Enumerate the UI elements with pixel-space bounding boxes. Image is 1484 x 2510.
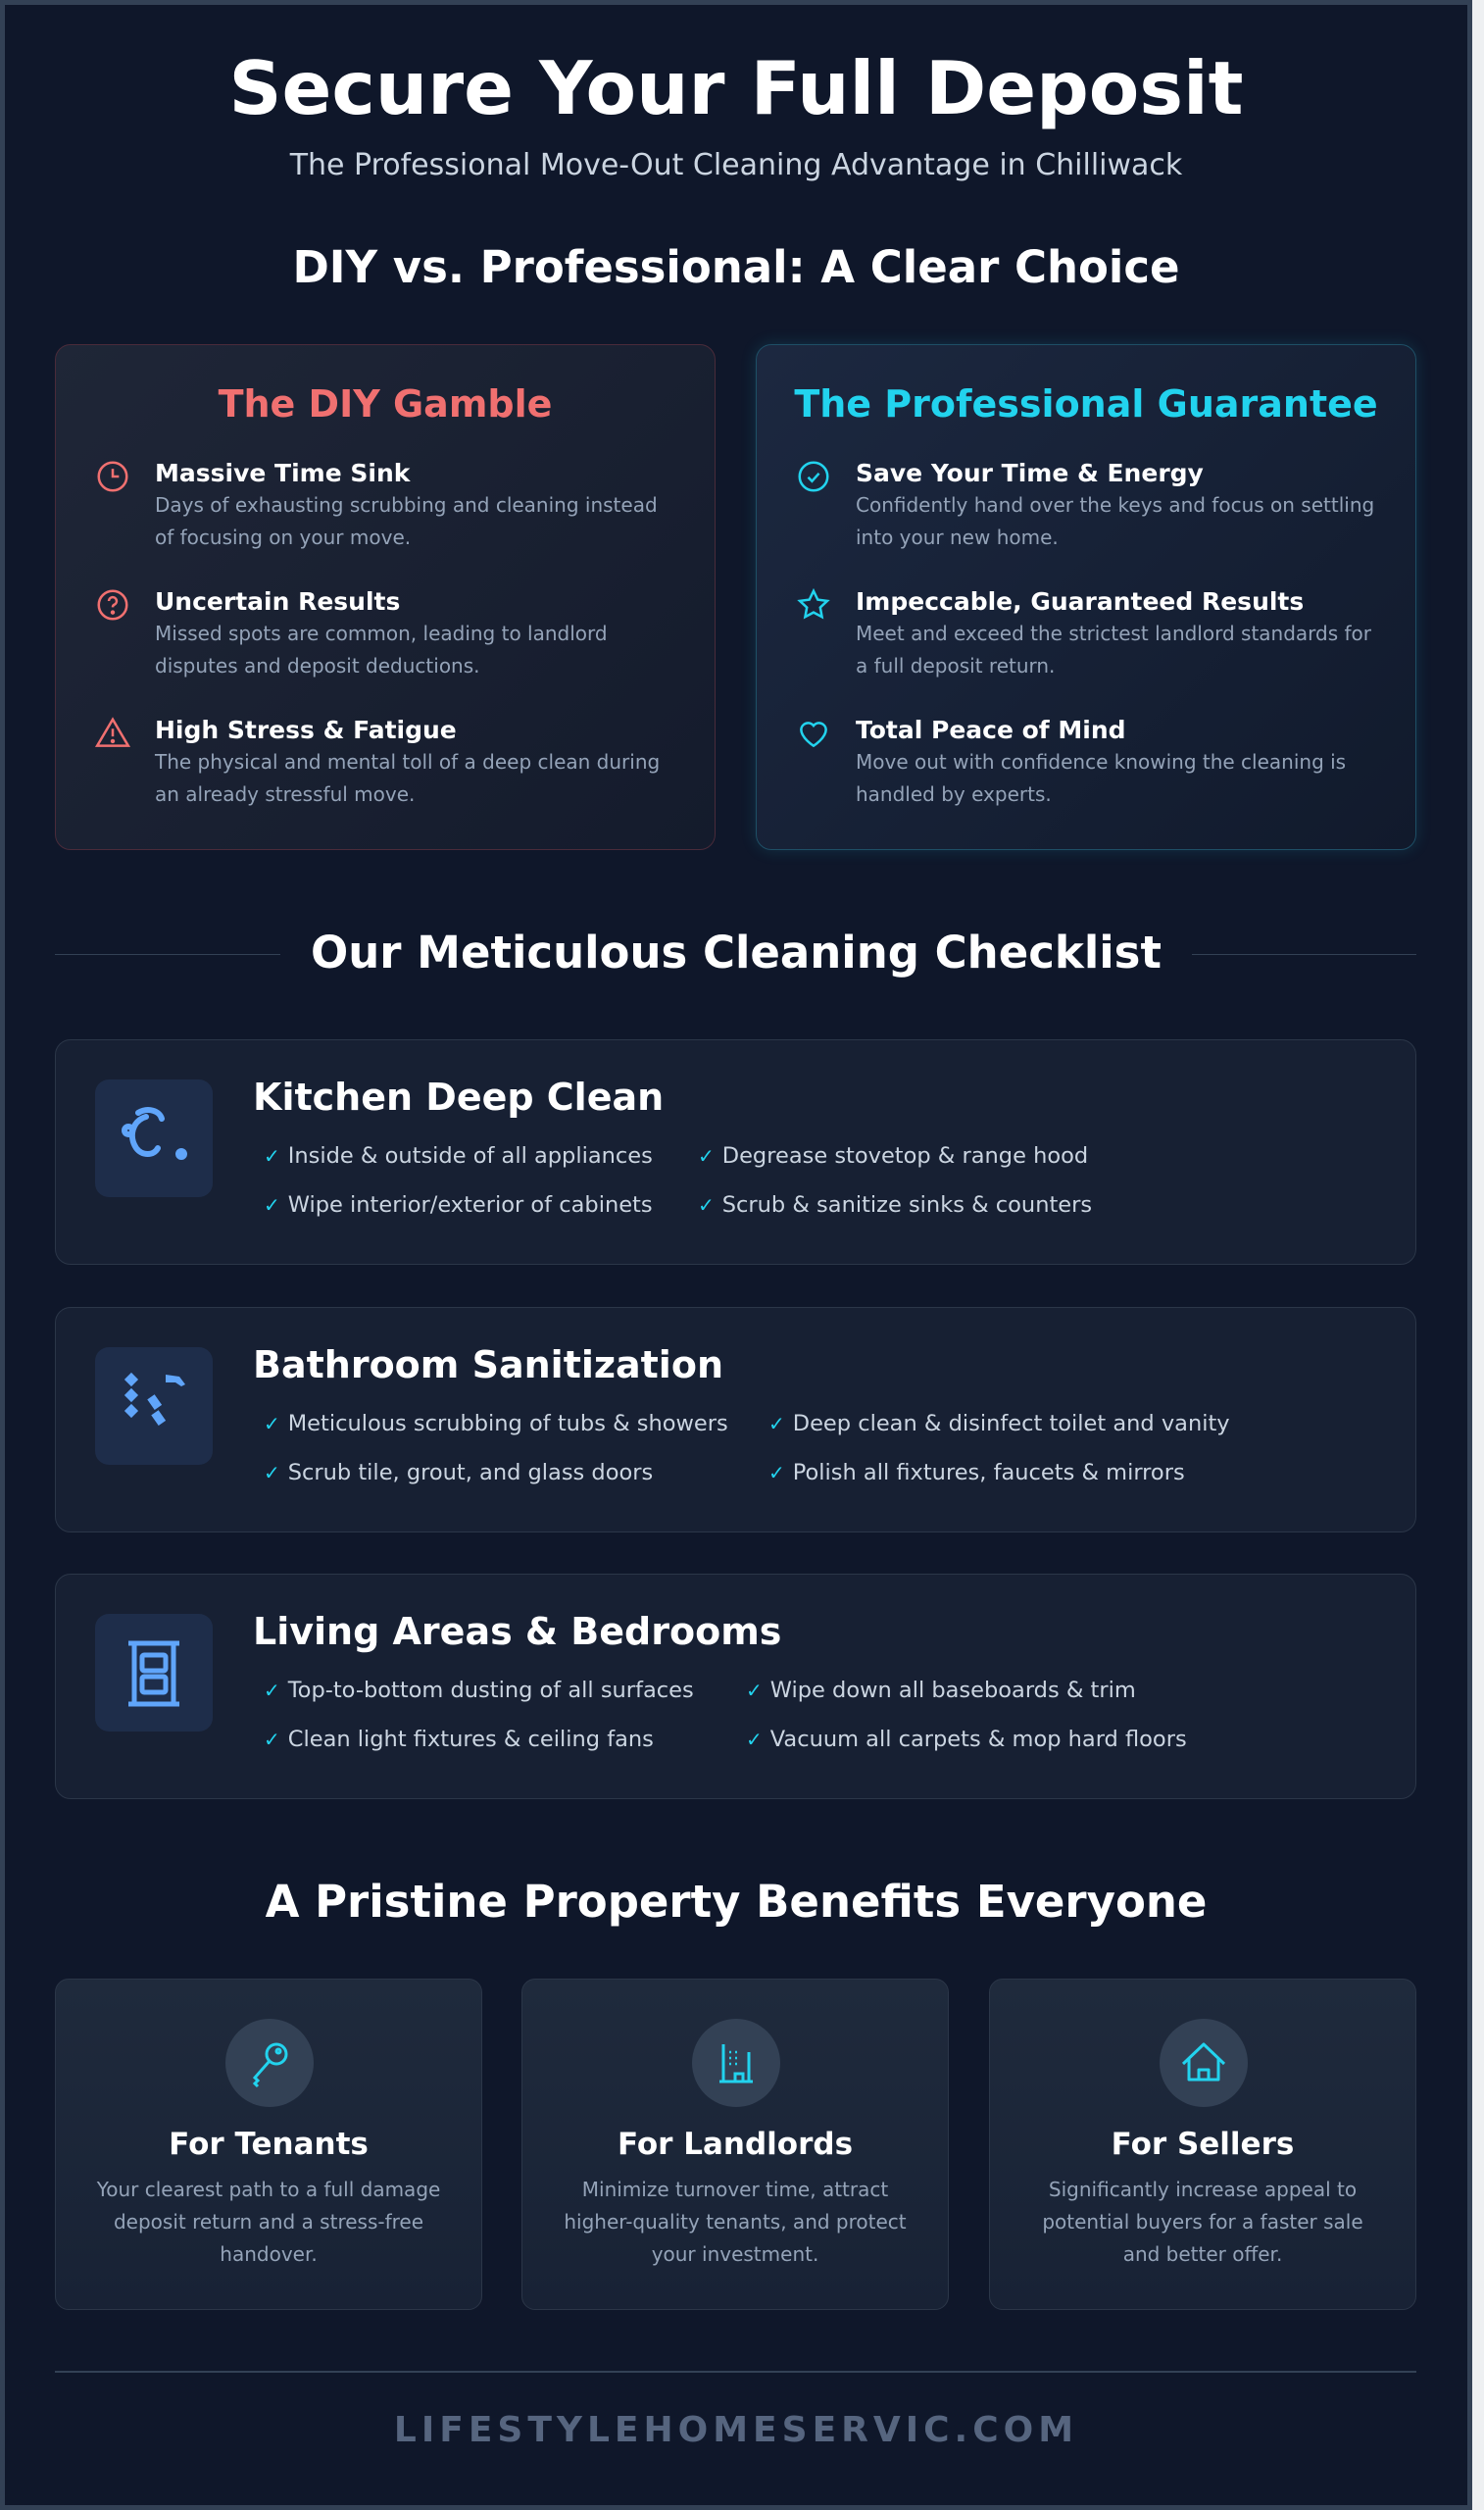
panel: bathroom: ✓ Deep clean & disinfect toilet and vanity: [768, 1411, 1230, 1436]
panel: bathroom: ✓ Polish all fixtures, faucets & mirrors: [768, 1460, 1185, 1485]
panel: bathroom: [55, 1307, 1416, 1532]
item: uncertain results: disputes and deposit deductions.: [155, 654, 480, 678]
panel: bathroom: ✓ Scrub tile, grout, and glass doors: [264, 1460, 653, 1485]
card: landlords: [521, 1979, 949, 2310]
item: save time: into your new home.: [856, 526, 1059, 549]
item: peace of mind: Move out with confidence knowing the cleaning is: [856, 750, 1346, 774]
icon: house: [1160, 2019, 1248, 2107]
panel: kitchen: Kitchen Deep Clean: [253, 1076, 664, 1119]
heading: benefits: A Pristine Property Benefits Everyone: [266, 1876, 1207, 1928]
subtitle: The Professional Move-Out Cleaning Advantage in Chilliwack: [290, 148, 1182, 182]
panel: kitchen: ✓ Inside & outside of all appliances: [264, 1143, 653, 1169]
icon: living: [95, 1614, 213, 1732]
heading: DIY vs Professional: DIY vs. Professional: A Clear Choice: [292, 241, 1180, 293]
panel: Professional guarantee: [756, 344, 1416, 850]
item: uncertain results: Missed spots are common, leading to landlord: [155, 622, 608, 645]
panel: DIY gamble: [55, 344, 716, 850]
panel: bathroom: ✓ Meticulous scrubbing of tubs & showers: [264, 1411, 728, 1436]
panel: living areas: Living Areas & Bedrooms: [253, 1610, 781, 1653]
item: stress: an already stressful move.: [155, 782, 415, 806]
panel: living areas: ✓ Vacuum all carpets & mop hard floors: [746, 1727, 1187, 1752]
heading: DIY: The DIY Gamble: [219, 382, 552, 426]
item: guaranteed results: [797, 587, 1371, 678]
card: landlords: For Landlords: [618, 2127, 853, 2162]
item: uncertain results: Uncertain Results: [155, 587, 400, 616]
item: peace of mind: Total Peace of Mind: [856, 716, 1126, 744]
card: sellers: Significantly increase appeal to potential buyers for a faster sale and better offer.: [1042, 2178, 1363, 2266]
card: tenants: [55, 1979, 482, 2310]
panel: living areas: [55, 1574, 1416, 1799]
item: time sink: Days of exhausting scrubbing and cleaning instead: [155, 493, 658, 517]
item: guaranteed results: a full deposit return.: [856, 654, 1055, 678]
item: stress: High Stress & Fatigue: [155, 716, 457, 744]
item: stress: The physical and mental toll of a deep clean during: [155, 750, 660, 774]
item: time sink: of focusing on your move.: [155, 526, 411, 549]
panel: living areas: ✓ Top-to-bottom dusting of all surfaces: [264, 1678, 694, 1703]
card: sellers: [989, 1979, 1416, 2310]
panel: kitchen: [55, 1039, 1416, 1265]
card: tenants: Your clearest path to a full damage deposit return and a stress-free handover.: [97, 2178, 440, 2266]
item: stress: [95, 716, 660, 806]
card: tenants: For Tenants: [169, 2127, 369, 2162]
heading: Professional: The Professional Guarantee: [794, 382, 1378, 426]
footer: website: LIFESTYLEHOMESERVIC.COM: [394, 2410, 1078, 2450]
panel: bathroom: Bathroom Sanitization: [253, 1343, 723, 1386]
heading: checklist: Our Meticulous Cleaning Checklist: [311, 927, 1162, 979]
icon: bathroom: [95, 1347, 213, 1465]
item: uncertain results: [98, 587, 608, 678]
icon: key: [225, 2019, 314, 2107]
card: landlords: Minimize turnover time, attract higher-quality tenants, and protect your investment.: [564, 2178, 907, 2266]
icon: kitchen: [95, 1079, 213, 1197]
card: sellers: For Sellers: [1112, 2127, 1294, 2162]
icon: building: [692, 2019, 780, 2107]
item: save time: Confidently hand over the keys and focus on settling: [856, 493, 1374, 517]
item: guaranteed results: Impeccable, Guaranteed Results: [856, 587, 1304, 616]
item: peace of mind: handled by experts.: [856, 782, 1052, 806]
panel: living areas: ✓ Clean light fixtures & ceiling fans: [264, 1727, 654, 1752]
item: peace of mind: [800, 716, 1346, 806]
panel: kitchen: ✓ Scrub & sanitize sinks & counters: [698, 1192, 1092, 1218]
item: time sink: [98, 459, 658, 549]
item: save time: [798, 459, 1374, 549]
item: save time: Save Your Time & Energy: [856, 459, 1204, 487]
item: time sink: Massive Time Sink: [155, 459, 410, 487]
panel: living areas: ✓ Wipe down all baseboards & trim: [746, 1678, 1136, 1703]
item: guaranteed results: Meet and exceed the strictest landlord standards for: [856, 622, 1371, 645]
title: Secure Your Full Deposit: [228, 45, 1244, 131]
panel: kitchen: ✓ Wipe interior/exterior of cabinets: [264, 1192, 653, 1218]
panel: kitchen: ✓ Degrease stovetop & range hood: [698, 1143, 1088, 1169]
